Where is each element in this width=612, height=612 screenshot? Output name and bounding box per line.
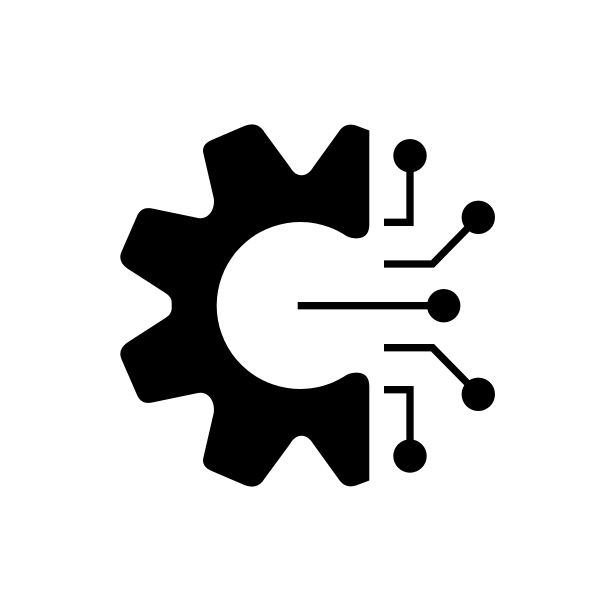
icon: circuit line top [384,139,427,222]
icon: circuit line lower right [384,348,495,411]
icon: circuit line bottom [384,390,427,473]
icon: half gear [120,124,369,487]
icon: circuit line middle [298,289,460,322]
icon: circuit line upper right [384,201,495,264]
